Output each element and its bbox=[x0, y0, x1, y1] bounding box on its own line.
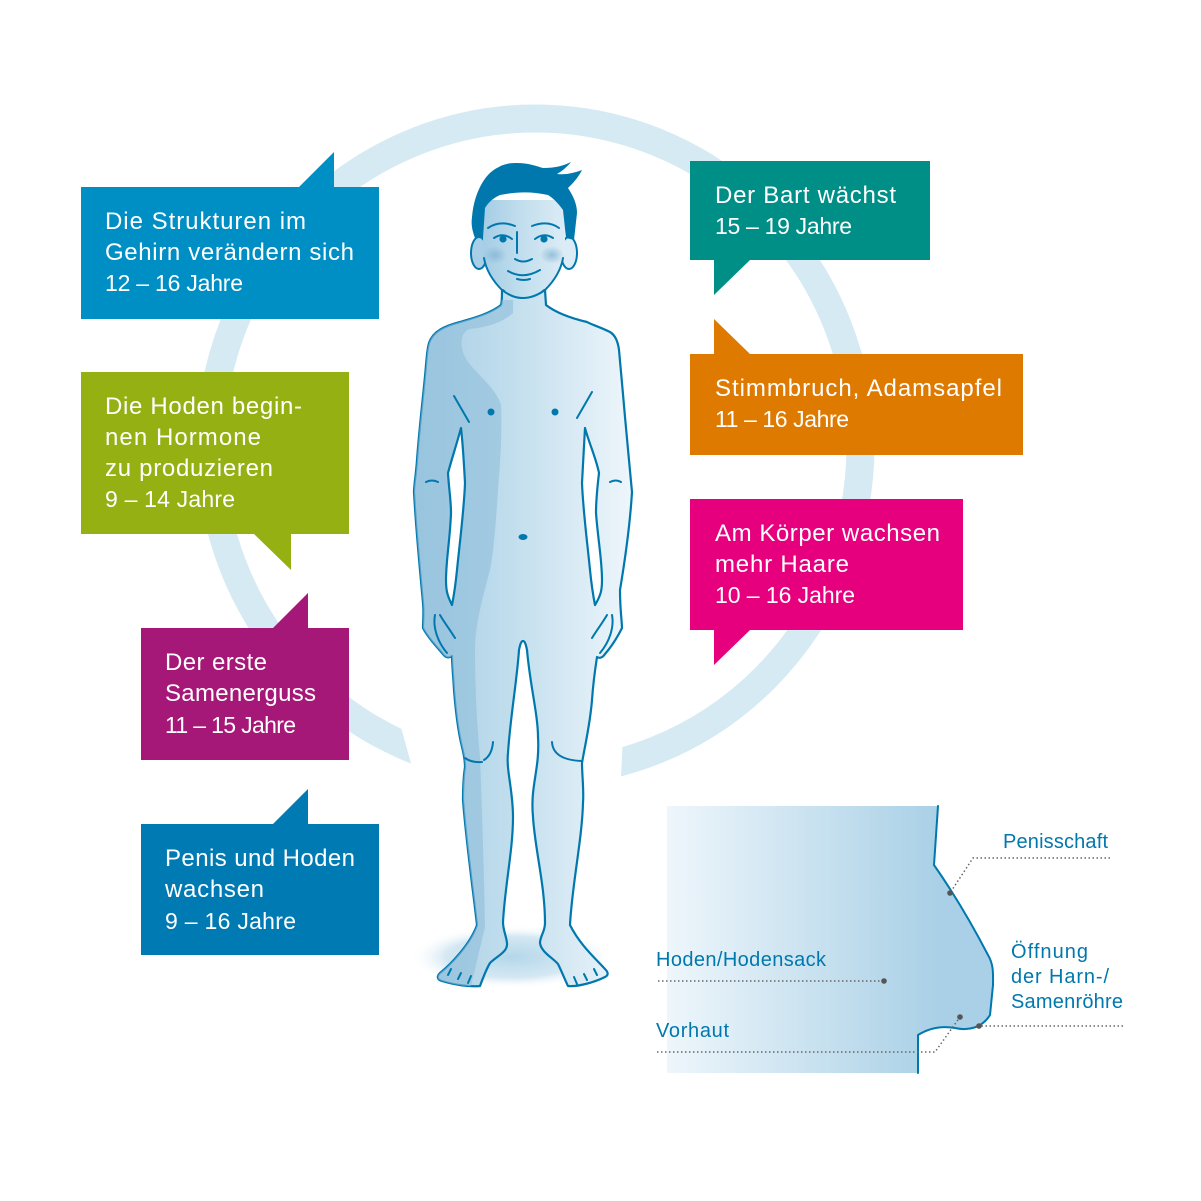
callout: Wachstum: wachsen bbox=[164, 876, 264, 903]
callout: Hoden bbox=[81, 372, 349, 570]
figure: human body schematic bbox=[410, 162, 632, 990]
callout: Samenerguss: Der erste bbox=[165, 649, 267, 676]
circular ring background bbox=[210, 118, 860, 800]
callout: Bart: 15 – 19 Jahre bbox=[715, 213, 852, 239]
callout: Körperhaare: Am Körper wachsen bbox=[715, 520, 940, 547]
callout: Körperhaare: 10 – 16 Jahre bbox=[715, 582, 855, 608]
callout: Gehirn: Gehirn verändern sich bbox=[105, 239, 354, 266]
facial features bbox=[488, 223, 559, 280]
jaw line bbox=[484, 258, 563, 298]
leader: Hoden/Hodensack bbox=[658, 978, 887, 984]
leader: Penisschaft bbox=[947, 858, 1110, 896]
callout: Samenerguss: 11 – 15 Jahre bbox=[165, 712, 296, 738]
callout: Körperhaare bbox=[690, 499, 963, 665]
callout: Wachstum bbox=[141, 789, 379, 955]
callout: Körperhaare: mehr Haare bbox=[715, 551, 849, 578]
face bbox=[483, 200, 565, 298]
callout: Bart bbox=[690, 161, 930, 295]
body detail lines bbox=[426, 392, 621, 984]
label: Öffnung der Harn-/Samenröhre: Öffnung bbox=[1011, 941, 1088, 963]
callout: Hoden: nen Hormone bbox=[105, 424, 261, 451]
leader: Öffnung bbox=[976, 1023, 1123, 1029]
inset outline bbox=[918, 806, 993, 1073]
callout: Wachstum: 9 – 16 Jahre bbox=[165, 908, 296, 934]
callout: Hoden: Die Hoden begin- bbox=[105, 393, 302, 420]
inset panel: labelled schematic bbox=[656, 806, 1123, 1073]
label: Vorhaut: Vorhaut bbox=[656, 1020, 729, 1042]
nipples and navel bbox=[488, 408, 558, 540]
label: Penisschaft: Penisschaft bbox=[1003, 831, 1108, 853]
callout: Gehirn: Die Strukturen im bbox=[105, 208, 306, 235]
leader: Vorhaut bbox=[657, 1014, 963, 1052]
label: Öffnung der Harn-/Samenröhre: Samenröhre bbox=[1011, 991, 1123, 1013]
body silhouette bbox=[414, 290, 632, 986]
hair bbox=[472, 162, 582, 240]
callout: Samenerguss bbox=[141, 593, 349, 760]
inset schematic shape bbox=[667, 806, 993, 1073]
callout: Stimmbruch: Stimmbruch, Adamsapfel bbox=[715, 375, 1002, 402]
label: Hoden/Hodensack: Hoden/Hodensack bbox=[656, 949, 827, 971]
callout: Stimmbruch: 11 – 16 Jahre bbox=[715, 406, 849, 432]
label: Öffnung der Harn-/Samenröhre: der Harn-/ bbox=[1011, 966, 1109, 988]
callout: Samenerguss: Samenerguss bbox=[165, 680, 316, 707]
callout: Gehirn bbox=[81, 152, 379, 319]
body side shading bbox=[410, 300, 513, 990]
callout: Stimmbruch bbox=[690, 319, 1023, 455]
ground shadow bbox=[410, 925, 614, 989]
callout: Hoden: 9 – 14 Jahre bbox=[105, 486, 235, 512]
callout: Bart: Der Bart wächst bbox=[715, 182, 896, 209]
callout: Gehirn: 12 – 16 Jahre bbox=[105, 270, 243, 296]
left ear bbox=[471, 237, 487, 269]
gap between left arm and torso bbox=[446, 428, 465, 605]
callout: Wachstum: Penis und Hoden bbox=[165, 845, 355, 872]
gap between right arm and torso bbox=[582, 428, 602, 605]
cheeks bbox=[483, 246, 564, 264]
callout: Hoden: zu produzieren bbox=[105, 455, 273, 482]
right ear bbox=[561, 237, 577, 269]
label: Öffnung der Harn-/Samenröhre bbox=[1011, 941, 1123, 1013]
